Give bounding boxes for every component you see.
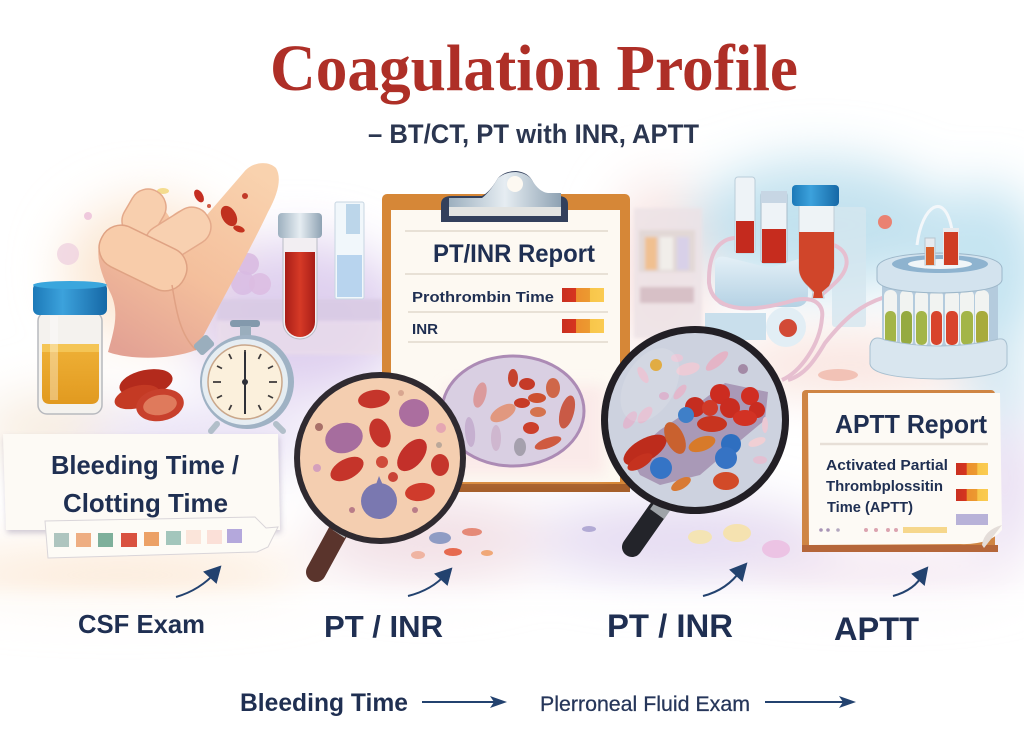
- arrow: to PT / INR left: [408, 569, 451, 596]
- rack tubes: [884, 290, 989, 347]
- subtitle: – BT/CT, PT with INR, APTT: [368, 119, 699, 149]
- icon: stopwatch: [193, 320, 294, 431]
- row: Prothrombin Time: [412, 288, 604, 306]
- lab shelf and bubbles left: [57, 188, 382, 355]
- panel: PT/INR clipboard: [382, 171, 630, 492]
- heading: PT/INR Report: PT/INR Report: [433, 240, 596, 268]
- heading: APTT Report: APTT Report: [835, 409, 987, 439]
- carousel base: [870, 338, 1007, 379]
- icon: tube analyzer machine: [705, 177, 952, 380]
- body text: Activated Partial Thrombplossitin Time (APTT): Thrombplossitin: [826, 479, 943, 495]
- color bars: [956, 463, 988, 525]
- bottom label: CSF Exam: CSF Exam: [78, 609, 205, 639]
- connecting pink tubing: [709, 238, 885, 380]
- label: Bleeding Time / Clotting Time: Clotting Time: [63, 488, 228, 518]
- flow label: Bleeding Time: Bleeding Time: [240, 689, 408, 717]
- bottom label: PT / INR left: PT / INR: [324, 609, 443, 644]
- bottom label: APTT: APTT: [834, 611, 919, 647]
- label: Bleeding Time / Clotting Time: Bleeding Time /: [51, 450, 239, 480]
- flow label: Plerroneal Fluid Exam: Plerroneal Fluid Exam: [540, 693, 750, 716]
- arrow: to PT / INR right: [703, 564, 746, 596]
- panel: Bleeding Time / Clotting Time card: [3, 434, 280, 558]
- arrow: bleeding time flow: [422, 696, 507, 708]
- background lab cabinet with bottles: [634, 208, 702, 338]
- icon: red blood cells: [112, 365, 186, 425]
- body text: Activated Partial Thrombplossitin Time (APTT): [826, 458, 948, 516]
- row: INR: [412, 319, 604, 338]
- icon: pricked finger hand: [92, 163, 279, 358]
- arrow: fluid exam flow: [765, 696, 856, 708]
- floor specks: [411, 524, 790, 559]
- row: INR: INR: [412, 321, 438, 338]
- row: Prothrombin Time: Prothrombin Time: [412, 289, 554, 306]
- icon: left magnifier: [294, 372, 466, 572]
- icon: right magnifier: [601, 326, 789, 547]
- panel: APTT report card: [802, 390, 1002, 552]
- label: Bleeding Time / Clotting Time: [51, 450, 239, 518]
- icon: water test tube: [335, 202, 364, 299]
- bottom label: PT / INR right: PT / INR: [607, 608, 733, 644]
- icon: urine specimen jar: [33, 281, 107, 414]
- pink tint behind the sample: [445, 385, 605, 475]
- title: Coagulation Profile: [270, 32, 798, 105]
- carousel tube rack: [818, 228, 1007, 381]
- icon: blood test tube: [278, 213, 322, 339]
- big blood tube with blue cap: [792, 185, 839, 298]
- body text: Activated Partial Thrombplossitin Time (APTT): Time (APTT): [827, 500, 913, 516]
- tubes on the machine: [735, 177, 787, 263]
- carousel top disk: [877, 253, 1002, 293]
- illustration: cell sample oval: [442, 356, 584, 466]
- body text: Activated Partial Thrombplossitin Time (APTT): Activated Partial: [826, 458, 948, 474]
- arrow: to APTT: [893, 568, 927, 596]
- icon: clipboard clip: [441, 171, 568, 222]
- arrow: to CSF Exam: [176, 567, 220, 597]
- color test strip: [45, 517, 278, 558]
